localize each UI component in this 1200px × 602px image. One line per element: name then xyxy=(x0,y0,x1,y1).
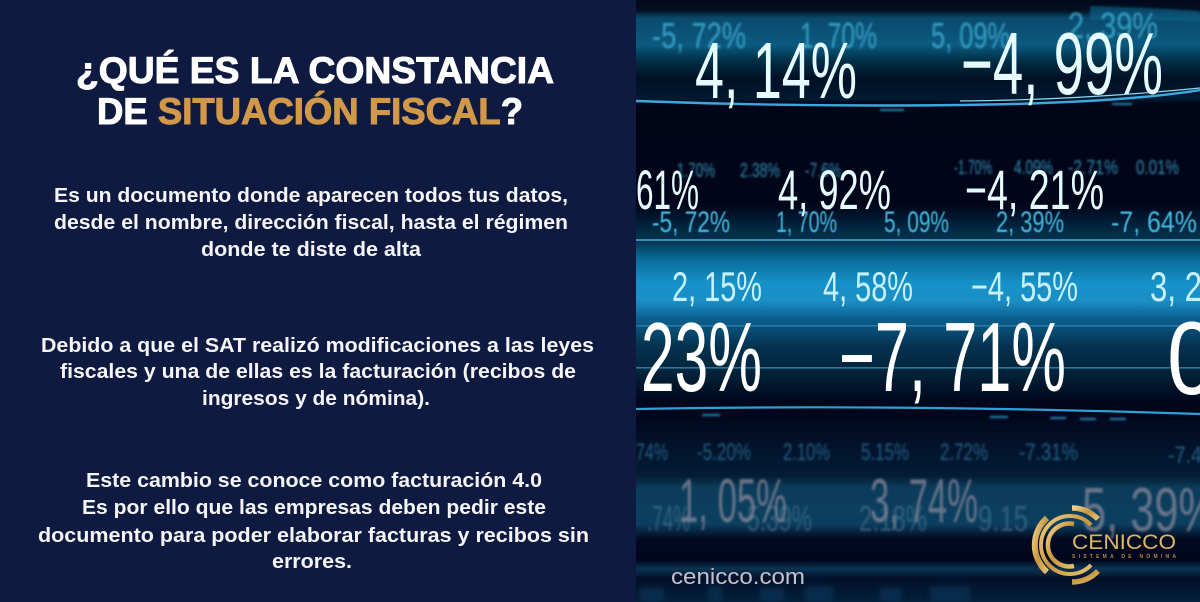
text block: reason xyxy=(41,334,594,410)
muted large ticker row: 3, 74% xyxy=(870,467,978,536)
text block: definition: Es un documento donde aparecen todos tus datos, xyxy=(54,184,568,207)
faint ticker rows: -7.6% xyxy=(805,160,841,182)
faint ticker rows: 2, 39% xyxy=(996,206,1064,239)
bright ticker numbers: 61% xyxy=(636,158,699,221)
bright ticker numbers: 4, 92% xyxy=(778,158,891,221)
faint ticker rows xyxy=(636,5,1200,602)
text block: facturación 4.0: errores. xyxy=(272,550,352,573)
panel: right financial ticker image xyxy=(636,0,1200,602)
faint ticker rows: 74% xyxy=(636,439,668,466)
text block: reason: Debido a que el SAT realizó modificaciones a las leyes xyxy=(41,334,594,357)
text block: facturación 4.0: Es por ello que las empresas deben pedir este xyxy=(82,496,546,519)
faint ticker rows: .74% xyxy=(647,498,690,539)
faint ticker rows: 0.01% xyxy=(1136,157,1179,179)
title: ¿QUÉ ES LA CONSTANCIA xyxy=(76,50,554,91)
bright ticker numbers: 2, 15% xyxy=(672,263,762,310)
text block: facturación 4.0: Este cambio se conoce como facturación 4.0 xyxy=(86,469,542,492)
text block: definition: desde el nombre, dirección fiscal, hasta el régimen xyxy=(54,211,568,234)
icon: gold concentric C arcs xyxy=(1035,508,1098,582)
faint ticker rows: 5.39% xyxy=(747,498,812,539)
faint ticker rows: 2, 39% xyxy=(1068,5,1158,46)
faint ticker rows: 2.18% xyxy=(859,498,927,539)
bright ticker numbers: 23% xyxy=(641,302,762,412)
faint ticker rows: 1, 70% xyxy=(800,15,877,56)
website url: cenicco.com xyxy=(671,564,805,589)
bright ticker numbers: −4, 21% xyxy=(965,158,1104,221)
muted large ticker row xyxy=(679,467,1200,545)
faint ticker rows: 5, 09% xyxy=(931,15,1010,56)
faint ticker rows: 1, 70% xyxy=(776,206,837,239)
panel: left navy background xyxy=(0,0,636,602)
faint ticker rows: 5, 09% xyxy=(884,206,949,239)
faint ticker rows: 2.72% xyxy=(940,439,988,466)
faint ticker rows: -2.71% xyxy=(1068,157,1118,179)
title xyxy=(76,50,554,132)
bright ticker numbers: 4, 14% xyxy=(695,26,857,115)
text block: facturación 4.0 xyxy=(38,469,589,573)
faint ticker rows: -5, 72% xyxy=(652,15,746,56)
faint ticker rows: 2.38% xyxy=(740,160,780,182)
bright ticker numbers xyxy=(636,14,1200,417)
faint ticker rows: -5.20% xyxy=(697,439,751,466)
logo tagline: SISTEMA DE NÓMINA xyxy=(1072,552,1176,560)
faint ticker rows: 2.10% xyxy=(783,439,830,466)
faint ticker rows: -5, 72% xyxy=(652,206,730,239)
faint ticker rows: 9.15 xyxy=(978,498,1028,539)
logo wordmark: CENICCO xyxy=(1072,531,1176,554)
bright ticker numbers: 4, 58% xyxy=(823,263,913,310)
title: DE SITUACIÓN FISCAL? xyxy=(97,90,523,132)
faint ticker rows: -7.31% xyxy=(1019,439,1078,466)
text block: reason: ingresos y de nómina). xyxy=(202,387,430,410)
faint ticker rows: 5.15% xyxy=(861,439,909,466)
text block: definition xyxy=(54,184,568,261)
text block: reason: fiscales y una de ellas es la facturación (recibos de xyxy=(60,360,576,383)
text block: facturación 4.0: documento para poder elaborar facturas y recibos sin xyxy=(38,524,589,547)
faint ticker rows: -1.70% xyxy=(954,157,992,179)
logo: Cenicco xyxy=(1035,508,1176,582)
muted large ticker row: 1, 05% xyxy=(679,467,787,536)
bright ticker numbers: −4, 55% xyxy=(971,263,1078,310)
text block: definition: donde te diste de alta xyxy=(201,238,422,261)
faint ticker rows: 1.70% xyxy=(677,160,715,182)
faint ticker rows: 4.09% xyxy=(1014,157,1053,179)
bright ticker numbers: −7, 71% xyxy=(839,302,1066,412)
